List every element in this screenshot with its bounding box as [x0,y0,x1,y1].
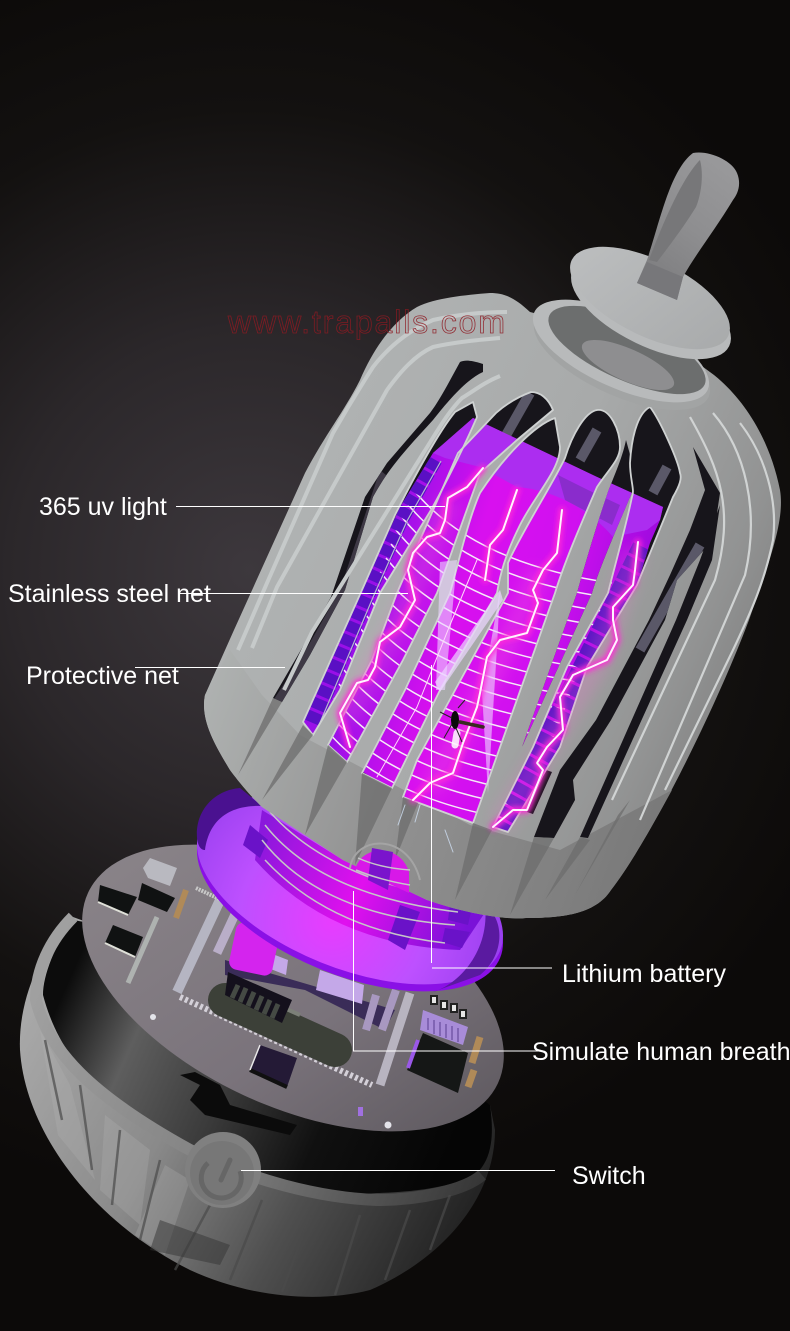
mosquito [440,700,483,745]
label: lithium battery [432,665,726,988]
rib edges [303,392,681,832]
power button [185,1132,261,1208]
label: lithium battery: Lithium battery [562,960,726,988]
label: stainless steel net: Stainless steel net [8,580,211,608]
light beams [435,560,503,793]
base notch showing coil [350,844,420,893]
label: protective net: Protective net [26,662,179,690]
dark wedges on base band [238,698,630,915]
label: switch: Switch [572,1162,646,1190]
label: simulate human breath [354,891,790,1066]
lightning bolts [340,468,638,852]
watermark: www.trapalls.com [227,304,505,340]
inner view: dark interior, purple core and rings [273,360,720,838]
hanging cap with loop handle [555,152,746,380]
lamp top ring [519,279,724,431]
label: simulate human breath: Simulate human breath [532,1038,790,1066]
lamp cage [200,290,790,918]
purple base disc with coil [196,788,503,992]
label: 365 uv light: 365 uv light [39,493,167,521]
lower shell [20,917,495,1297]
circuit board [38,786,548,1190]
rib highlights [238,312,507,690]
pink glow on ribs [345,500,635,825]
